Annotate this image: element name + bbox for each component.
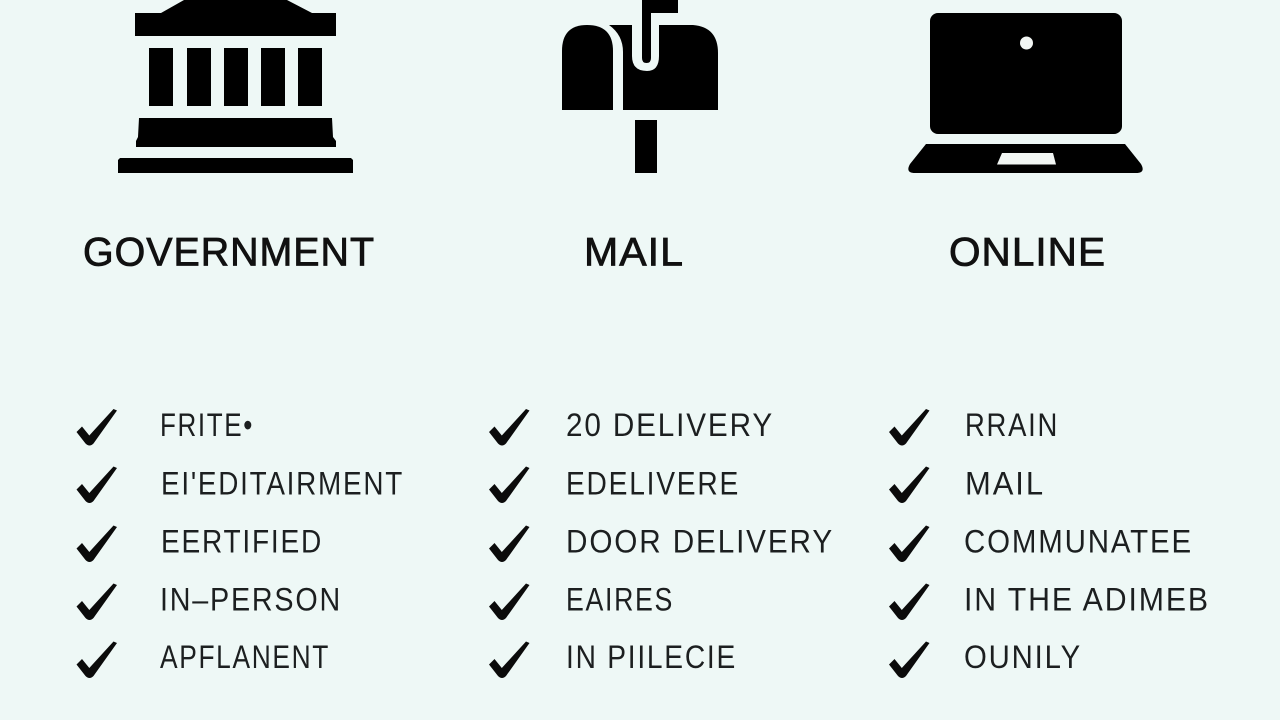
item: ounily: OUNILY — [964, 639, 1082, 675]
list: mail — [489, 407, 834, 678]
item: in piilecie: IN PIILECIE — [566, 639, 737, 675]
item: eaires — [489, 582, 674, 620]
item: expeditairment — [76, 466, 404, 503]
item: in the adimeb: IN THE ADIMEB — [964, 582, 1210, 618]
item: in piilecie — [489, 639, 737, 678]
icon: laptop — [908, 13, 1143, 173]
panel: online — [889, 13, 1210, 678]
panel: mail — [489, 0, 834, 678]
item: in-person: IN–PERSON — [160, 582, 342, 618]
item: in-person — [76, 582, 342, 620]
item: frite: FRITE• — [160, 407, 254, 443]
item: eaires: EAIRES — [566, 582, 674, 618]
item: certified — [76, 524, 323, 562]
item: rrain: RRAIN — [965, 407, 1059, 443]
item: rrain — [889, 407, 1059, 446]
item: door delivery — [489, 524, 834, 562]
list: government — [76, 407, 404, 678]
item: edelivere — [489, 466, 740, 503]
list: online — [889, 407, 1210, 678]
item: communatee — [889, 524, 1193, 562]
item: mail: MAIL — [965, 466, 1045, 502]
item: 20 delivery: 20 DELIVERY — [566, 407, 774, 443]
item: communatee: COMMUNATEE — [964, 524, 1193, 560]
heading: government: GOVERNMENT — [83, 230, 375, 274]
icon: government building — [118, 0, 353, 173]
item: applent — [76, 639, 330, 678]
panel: government — [76, 0, 404, 678]
heading: online: ONLINE — [949, 230, 1106, 274]
item: mail — [889, 466, 1045, 503]
heading: mail: MAIL — [584, 230, 684, 274]
item: expeditairment: EI'EDITAIRMENT — [161, 466, 404, 502]
item: door delivery: DOOR DELIVERY — [566, 524, 834, 560]
item: ounily — [889, 639, 1082, 678]
item: 20 delivery — [489, 407, 774, 446]
icon: mailbox — [562, 0, 718, 173]
item: frite — [76, 407, 254, 446]
item: applent: APFLANENT — [160, 639, 330, 675]
item: edelivere: EDELIVERE — [566, 466, 740, 502]
item: in the adimeb — [889, 582, 1210, 620]
item: certified: EERTIFIED — [161, 524, 323, 560]
